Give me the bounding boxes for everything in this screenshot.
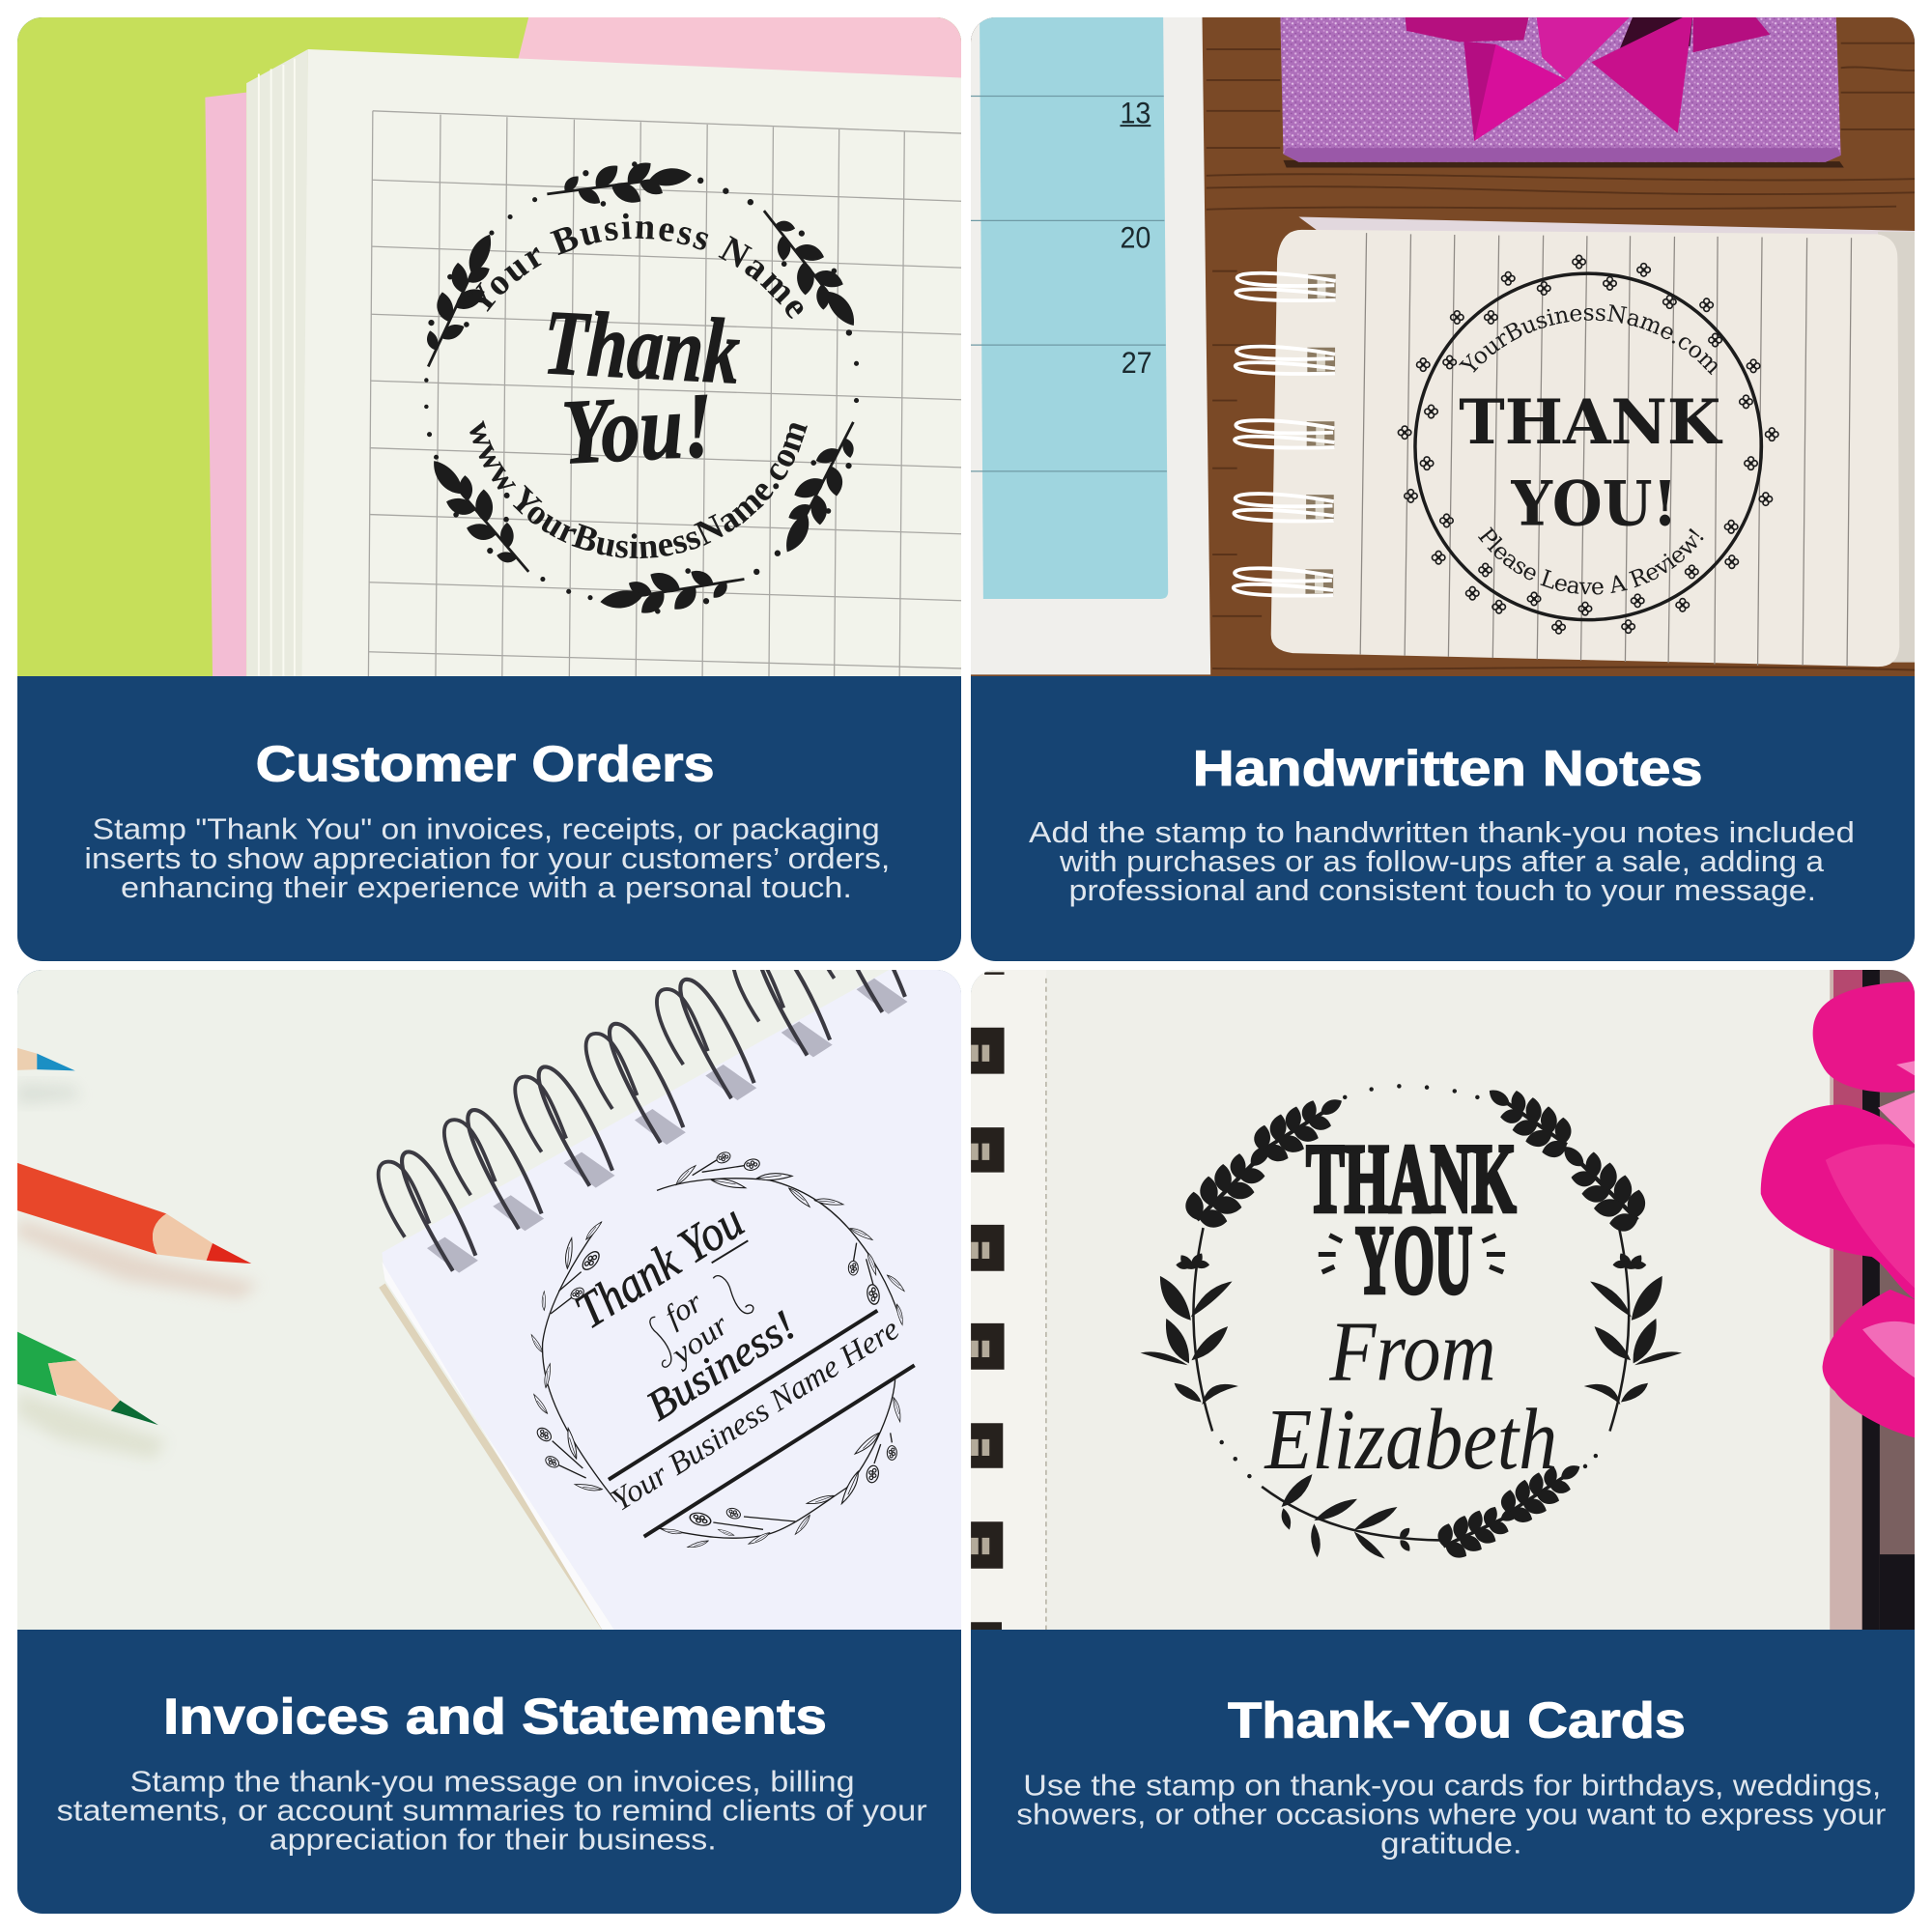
panel: customer orders — [17, 17, 961, 961]
text: handwritten notes description — [1029, 815, 1855, 907]
stamp on notebook — [529, 1151, 915, 1549]
stamp text: review: Please Leave A Review! — [1478, 526, 1704, 595]
text: customer orders description — [84, 812, 890, 904]
stamp: floral wreath with dots — [405, 150, 876, 627]
binder rings — [971, 972, 1005, 1637]
stamp text: thank: THANK — [1459, 386, 1723, 459]
stamp text: for: for — [659, 1285, 708, 1333]
photo: spiral notebook and coloured pencils — [0, 894, 985, 1637]
stamp text: thank you: Thank You — [566, 1193, 753, 1340]
stamp: flower wreath ring — [1398, 255, 1778, 634]
stamp text: thank: THANK — [1306, 1124, 1517, 1234]
stamp text: you: YOU — [1355, 1206, 1472, 1314]
panel: thank-you cards — [966, 966, 1932, 1914]
gift box with bow — [1280, 13, 1844, 167]
panel: handwritten notes — [971, 17, 1915, 961]
stamp text: thank: Thank — [541, 291, 742, 403]
stamp text: from: From — [1328, 1304, 1496, 1400]
stamp text: business: Business! — [639, 1301, 804, 1430]
heading: invoices and statements: Invoices and Statements — [163, 1690, 827, 1746]
text: customer orders description: enhancing their experience with a personal touch. — [121, 870, 852, 904]
planner edge — [1830, 970, 1915, 1630]
text: customer orders description: Stamp "Thank You" on invoices, receipts, or packaging — [93, 812, 880, 846]
heading: thank-you cards: Thank-You Cards — [1228, 1692, 1686, 1748]
stamp dividers — [609, 1311, 915, 1537]
stamp text: elizabeth: Elizabeth — [1264, 1390, 1557, 1488]
flowers — [1761, 981, 1927, 1440]
text: handwritten notes description: Add the stamp to handwritten thank-you notes included — [1029, 815, 1855, 849]
text: invoices description: appreciation for their business. — [270, 1823, 717, 1857]
stamp text: you: You! — [559, 374, 716, 484]
calendar dates: 20 — [1120, 219, 1151, 254]
text: invoices description — [57, 1765, 927, 1857]
stamp text: website: www.YourBusinessName.com — [469, 420, 808, 558]
photo: textured card with stamp and pink flower — [966, 966, 1932, 1637]
stamp text: you: YOU! — [1511, 468, 1678, 540]
spiral notepad — [1234, 217, 1932, 667]
notebook pages — [377, 970, 961, 1630]
text: thank-you cards description: Use the stamp on thank-you cards for birthdays, weddings, — [1023, 1768, 1881, 1802]
stamp text: business name: Your Business Name Here — [606, 1312, 905, 1519]
text: thank-you cards description: gratitude. — [1380, 1826, 1522, 1860]
stamp text: your: your — [663, 1307, 735, 1373]
pencils — [0, 1043, 259, 1459]
stamp: lavender wreath — [1140, 1069, 1682, 1570]
text: invoices description: Stamp the thank-you message on invoices, billing — [130, 1765, 855, 1799]
calendar dates: 27 — [1122, 345, 1152, 380]
calendar dates — [1120, 96, 1152, 380]
photo: notebook with floral thank-you stamp — [17, 17, 961, 676]
stamp text: your business name: Your Business Name — [475, 213, 804, 319]
panel: invoices and statements — [17, 970, 961, 1914]
text: thank-you cards description — [1016, 1768, 1886, 1860]
stamp text: website: YourBusinessName.com — [1459, 304, 1718, 375]
heading: handwritten notes: Handwritten Notes — [1193, 741, 1703, 797]
photo: spiral notepad with stamp on wooden desk — [971, 17, 1915, 676]
text: invoices description: statements, or account summaries to remind clients of your — [57, 1794, 927, 1828]
heading: customer orders: Customer Orders — [256, 737, 715, 793]
calendar dates: 13 — [1120, 96, 1151, 130]
text: handwritten notes description: professional and consistent touch to your message. — [1068, 873, 1816, 907]
stamp: line-art wreath — [529, 1151, 906, 1549]
text: thank-you cards description: showers, or other occasions where you want to express your — [1016, 1797, 1886, 1831]
text: customer orders description: inserts to show appreciation for your customers’ orders, — [84, 841, 890, 875]
text: handwritten notes description: with purchases or as follow-ups after a sale, adding a — [1059, 844, 1825, 878]
